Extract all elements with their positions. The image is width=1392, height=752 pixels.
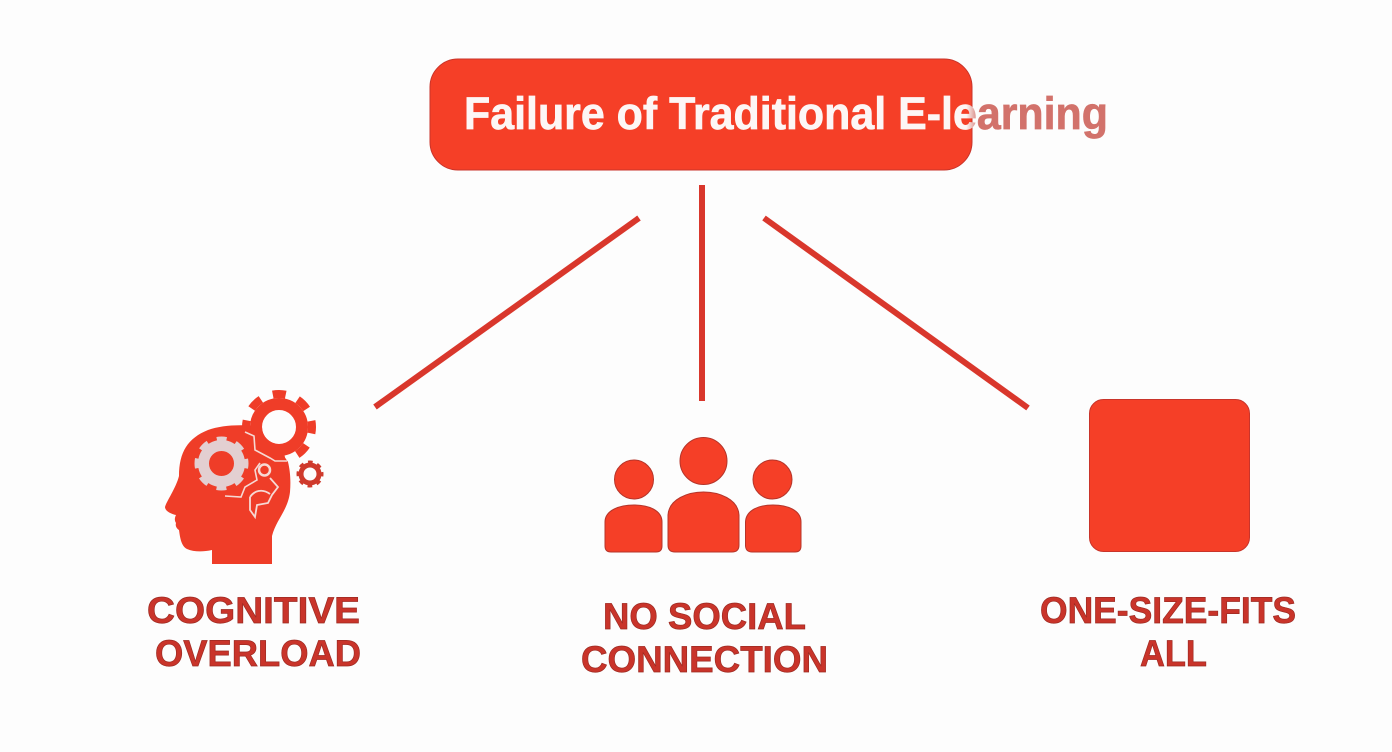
arrow: connector to no social connection xyxy=(699,185,705,401)
left person xyxy=(605,460,662,552)
label: no social connection: CONNECTION xyxy=(581,639,828,680)
brain small gear xyxy=(259,464,270,476)
centre person xyxy=(668,438,739,552)
title: Failure of Traditional E-learning xyxy=(464,88,1108,139)
large gear xyxy=(246,394,312,460)
right person xyxy=(746,460,801,552)
brain outline xyxy=(250,478,278,517)
label: cognitive overload: COGNITIVE xyxy=(147,590,360,631)
grey gear xyxy=(198,440,246,488)
pale separator lines xyxy=(225,432,287,497)
head silhouette xyxy=(165,425,290,564)
small gear xyxy=(298,462,322,486)
arrow: connector to cognitive overload xyxy=(375,218,639,407)
label: cognitive overload xyxy=(147,590,361,674)
label: one-size-fits all: ALL xyxy=(1140,633,1207,674)
arrow: connector to one-size-fits all xyxy=(764,218,1028,408)
label: one-size-fits all: ONE-SIZE-FITS xyxy=(1040,590,1296,631)
label: no social connection: NO SOCIAL xyxy=(603,596,806,637)
label: cognitive overload: OVERLOAD xyxy=(155,633,361,674)
label: one-size-fits all xyxy=(1040,590,1296,674)
icon: head with gears xyxy=(165,394,322,564)
label: no social connection xyxy=(581,596,828,680)
panel: title box xyxy=(430,59,1108,170)
icon: solid square xyxy=(1090,400,1250,552)
icon: three people xyxy=(605,438,801,552)
